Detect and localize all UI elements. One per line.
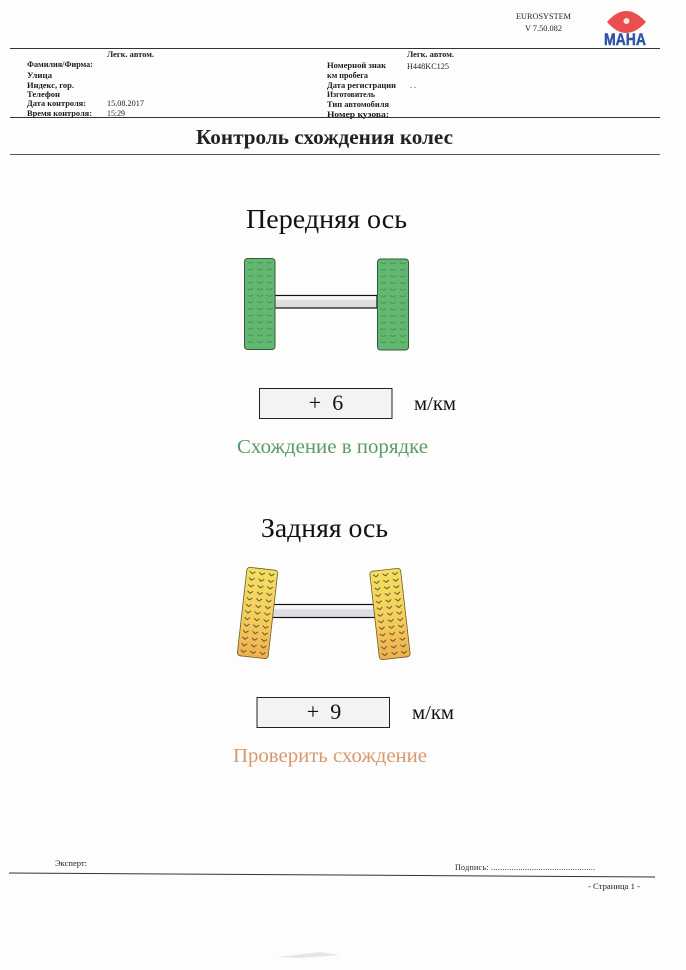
footer signature fields [55,859,595,872]
icon: MAHA logo: MAHA [604,30,646,49]
panel: vehicle details: Легк. автом. [407,50,454,59]
header rule [10,48,660,49]
heading: rear axle: Задняя ось [261,513,388,543]
panel: customer details: Телефон [27,90,60,99]
panel: customer details: 15.08.2017 [107,99,144,108]
panel: customer details: Время контроля: [27,109,92,118]
panel: vehicle details: H448KC125 [407,62,449,71]
front value box [260,388,392,418]
panel: customer details: Фамилия/Фирма: [27,60,93,69]
icon: rear axle with yellow wheels [237,567,410,660]
icon: front axle with green wheels [244,258,408,350]
footer rule [9,872,655,878]
panel: vehicle details: Дата регистрации [327,81,396,90]
page number: - Страница 1 - [588,882,640,891]
software version: V 7.50.082 [525,23,562,33]
panel: vehicle details: Номер кузова: [327,110,389,119]
footer signature fields: Подпись: .............................................. [455,863,595,872]
rear unit: м/км [412,702,454,724]
software version [516,11,571,33]
panel: customer details: Индекс, гор. [27,81,74,90]
rear value box: + 9 [307,699,341,724]
front value box: + 6 [309,390,343,415]
footer signature fields: Эксперт: [55,859,87,868]
heading: front axle: Передняя ось [246,204,407,234]
software version: EUROSYSTEM [516,11,571,21]
panel: customer details [27,50,154,118]
panel: customer details: Легк. автом. [107,50,154,59]
header rule [10,117,660,118]
panel: vehicle details: Тип автомобиля [327,100,390,109]
panel: customer details: Улица [27,71,52,80]
front unit: м/км [414,393,456,415]
panel: vehicle details: . . [410,81,416,90]
icon: MAHA logo [604,11,646,49]
title rule [10,154,660,155]
rear value box [257,698,390,728]
panel: vehicle details: Номерной знак [327,61,386,70]
front status: Схождение в порядке [237,436,428,458]
panel: vehicle details: км пробега [327,71,368,80]
panel: vehicle details [327,50,454,119]
title: Контроль схождения колес [196,125,453,149]
rear status: Проверить схождение [233,745,427,767]
panel: vehicle details: Изготовитель [327,90,376,99]
panel: customer details: 15:29 [107,109,125,118]
panel: customer details: Дата контроля: [27,99,86,108]
